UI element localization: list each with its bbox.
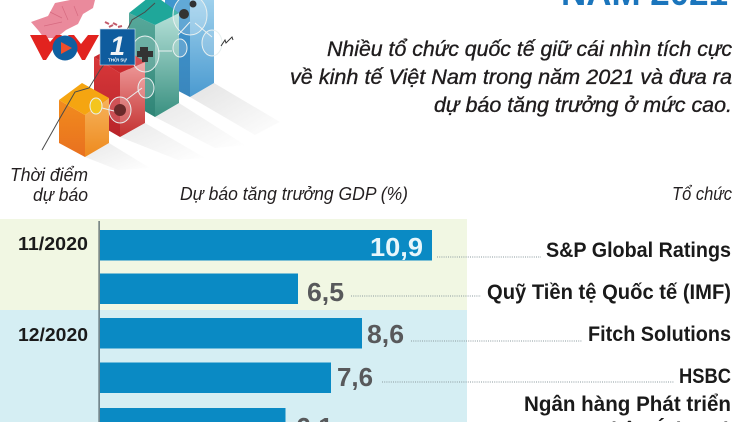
- row: S&P Global Ratings 10,9: 10,9: [370, 232, 423, 262]
- row: Fitch Solutions 8,6: [100, 318, 731, 349]
- row: HSBC 7,6: 7,6: [337, 362, 373, 392]
- logo: channel 1 badge: [100, 29, 135, 65]
- map of Vietnam: [31, 0, 122, 38]
- axis line: [98, 221, 100, 422]
- logo: VOV: [30, 35, 99, 60]
- intro text: dự báo tăng trưởng ở mức cao.: [434, 94, 732, 117]
- row: ADB 6,1: [100, 393, 731, 422]
- row: S&P Global Ratings 10,9: [100, 230, 731, 262]
- row: Fitch Solutions 8,6: 8,6: [367, 319, 404, 349]
- panel: December 2020 band: [0, 310, 467, 422]
- column heading: organisation: Tổ chức: [672, 184, 732, 204]
- row: IMF 6,5: 6,5: [307, 277, 344, 307]
- row: IMF 6,5: Quỹ Tiền tệ Quốc tế (IMF): [487, 281, 731, 304]
- intro text: về kinh tế Việt Nam trong năm 2021 và đưa ra: [290, 66, 732, 89]
- row: ADB 6,1: Ngân hàng Phát triển: [524, 393, 731, 416]
- row: S&P Global Ratings 10,9: S&P Global Ratings: [546, 239, 731, 262]
- logo: channel 1 badge: 1: [110, 31, 125, 61]
- date label: 12/2020: 12/2020: [18, 325, 88, 345]
- column heading: forecast time: Thời điểm: [10, 165, 88, 185]
- illustration: 3D bar columns: [42, 0, 280, 170]
- row: HSBC 7,6: HSBC: [679, 365, 731, 388]
- row: IMF 6,5: [100, 274, 731, 307]
- column heading: forecast time: [10, 165, 88, 205]
- panel: November 2020 band: [0, 219, 467, 310]
- column heading: GDP forecast: Dự báo tăng trưởng GDP (%): [180, 184, 408, 204]
- date label: 11/2020: 11/2020: [18, 234, 88, 254]
- intro text: Nhiều tổ chức quốc tế giữ cái nhìn tích cực: [327, 38, 732, 61]
- intro text: [290, 38, 732, 117]
- logo: channel 1 badge: THỜI SỰ: [108, 56, 127, 62]
- row: Fitch Solutions 8,6: Fitch Solutions: [588, 323, 731, 346]
- row: HSBC 7,6: [100, 362, 731, 393]
- column heading: forecast time: dự báo: [33, 185, 88, 205]
- network circles: [90, 0, 233, 123]
